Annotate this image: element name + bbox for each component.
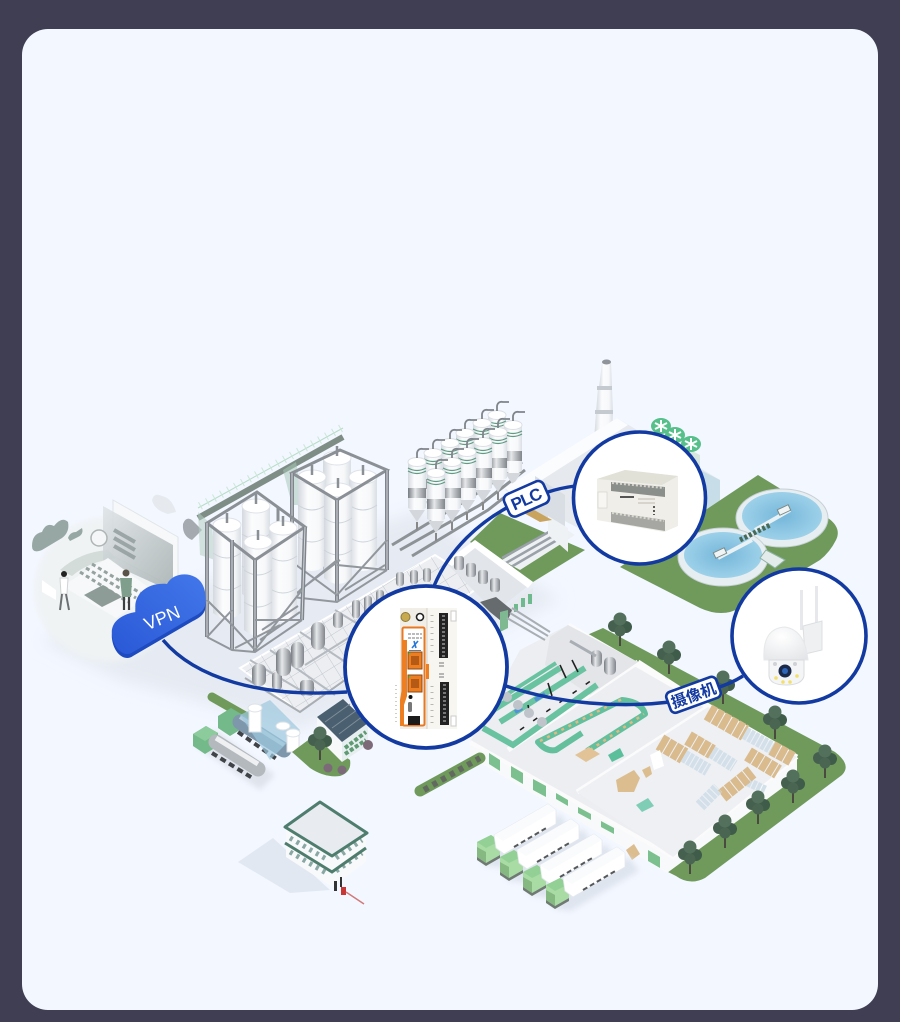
silos: small process tanks <box>392 402 525 556</box>
trees around factory <box>608 612 837 778</box>
icon: person at right <box>120 570 132 610</box>
chimney <box>594 360 613 440</box>
hedge strip <box>420 758 480 791</box>
front doors <box>489 753 660 868</box>
tanker truck rear <box>218 708 284 760</box>
callout: gateway <box>345 586 507 748</box>
water treatment tanks <box>678 489 828 586</box>
silos: large group front <box>207 492 305 652</box>
factory building <box>470 597 797 873</box>
boxes and forklift <box>575 747 600 762</box>
lower office building <box>238 802 367 904</box>
walkway: green railing bridge <box>198 426 345 560</box>
factory lawn <box>587 628 846 882</box>
illustration: remote control dashboard <box>32 495 202 662</box>
label: VPN: VPN <box>141 602 183 634</box>
mixers <box>591 650 616 675</box>
tanker loading station <box>193 697 300 790</box>
silos: large group rear <box>292 446 387 602</box>
warehouse floor and shelves <box>577 707 797 857</box>
icon: person at left <box>60 571 69 610</box>
lawn with pipes <box>470 502 585 582</box>
tanker truck front <box>193 726 258 779</box>
trees along front <box>678 770 805 874</box>
delivery trucks <box>477 804 639 911</box>
process room <box>445 540 533 614</box>
label: camera: 摄像机 <box>669 678 719 712</box>
connection lines <box>163 486 743 705</box>
line: gateway to PLC <box>434 486 575 586</box>
water treatment lawn <box>620 475 838 613</box>
icon: cooling fans <box>650 418 701 480</box>
oval conveyor <box>538 700 645 751</box>
device: VPN gateway <box>396 608 457 729</box>
small office with lawn <box>292 699 373 776</box>
device: network camera <box>764 586 822 685</box>
label: PLC <box>502 479 551 519</box>
callout: camera <box>732 569 866 703</box>
packing lines <box>483 660 597 745</box>
device: PLC controller <box>597 470 678 532</box>
icon: grey clouds <box>32 520 82 551</box>
line: gateway to camera <box>506 676 743 705</box>
icon: red barrier and people <box>334 877 364 904</box>
ground shadow: plant zone <box>40 510 560 730</box>
label: PLC: PLC <box>508 484 545 514</box>
icon: pale clouds <box>152 495 202 540</box>
process plant: translucent production floor <box>240 555 482 712</box>
icon: VPN cloud <box>112 574 206 658</box>
line: VPN to gateway <box>163 640 347 693</box>
boiler building <box>505 418 720 560</box>
icon: entrance arch and pipes <box>480 597 550 640</box>
callout: PLC <box>574 432 706 564</box>
